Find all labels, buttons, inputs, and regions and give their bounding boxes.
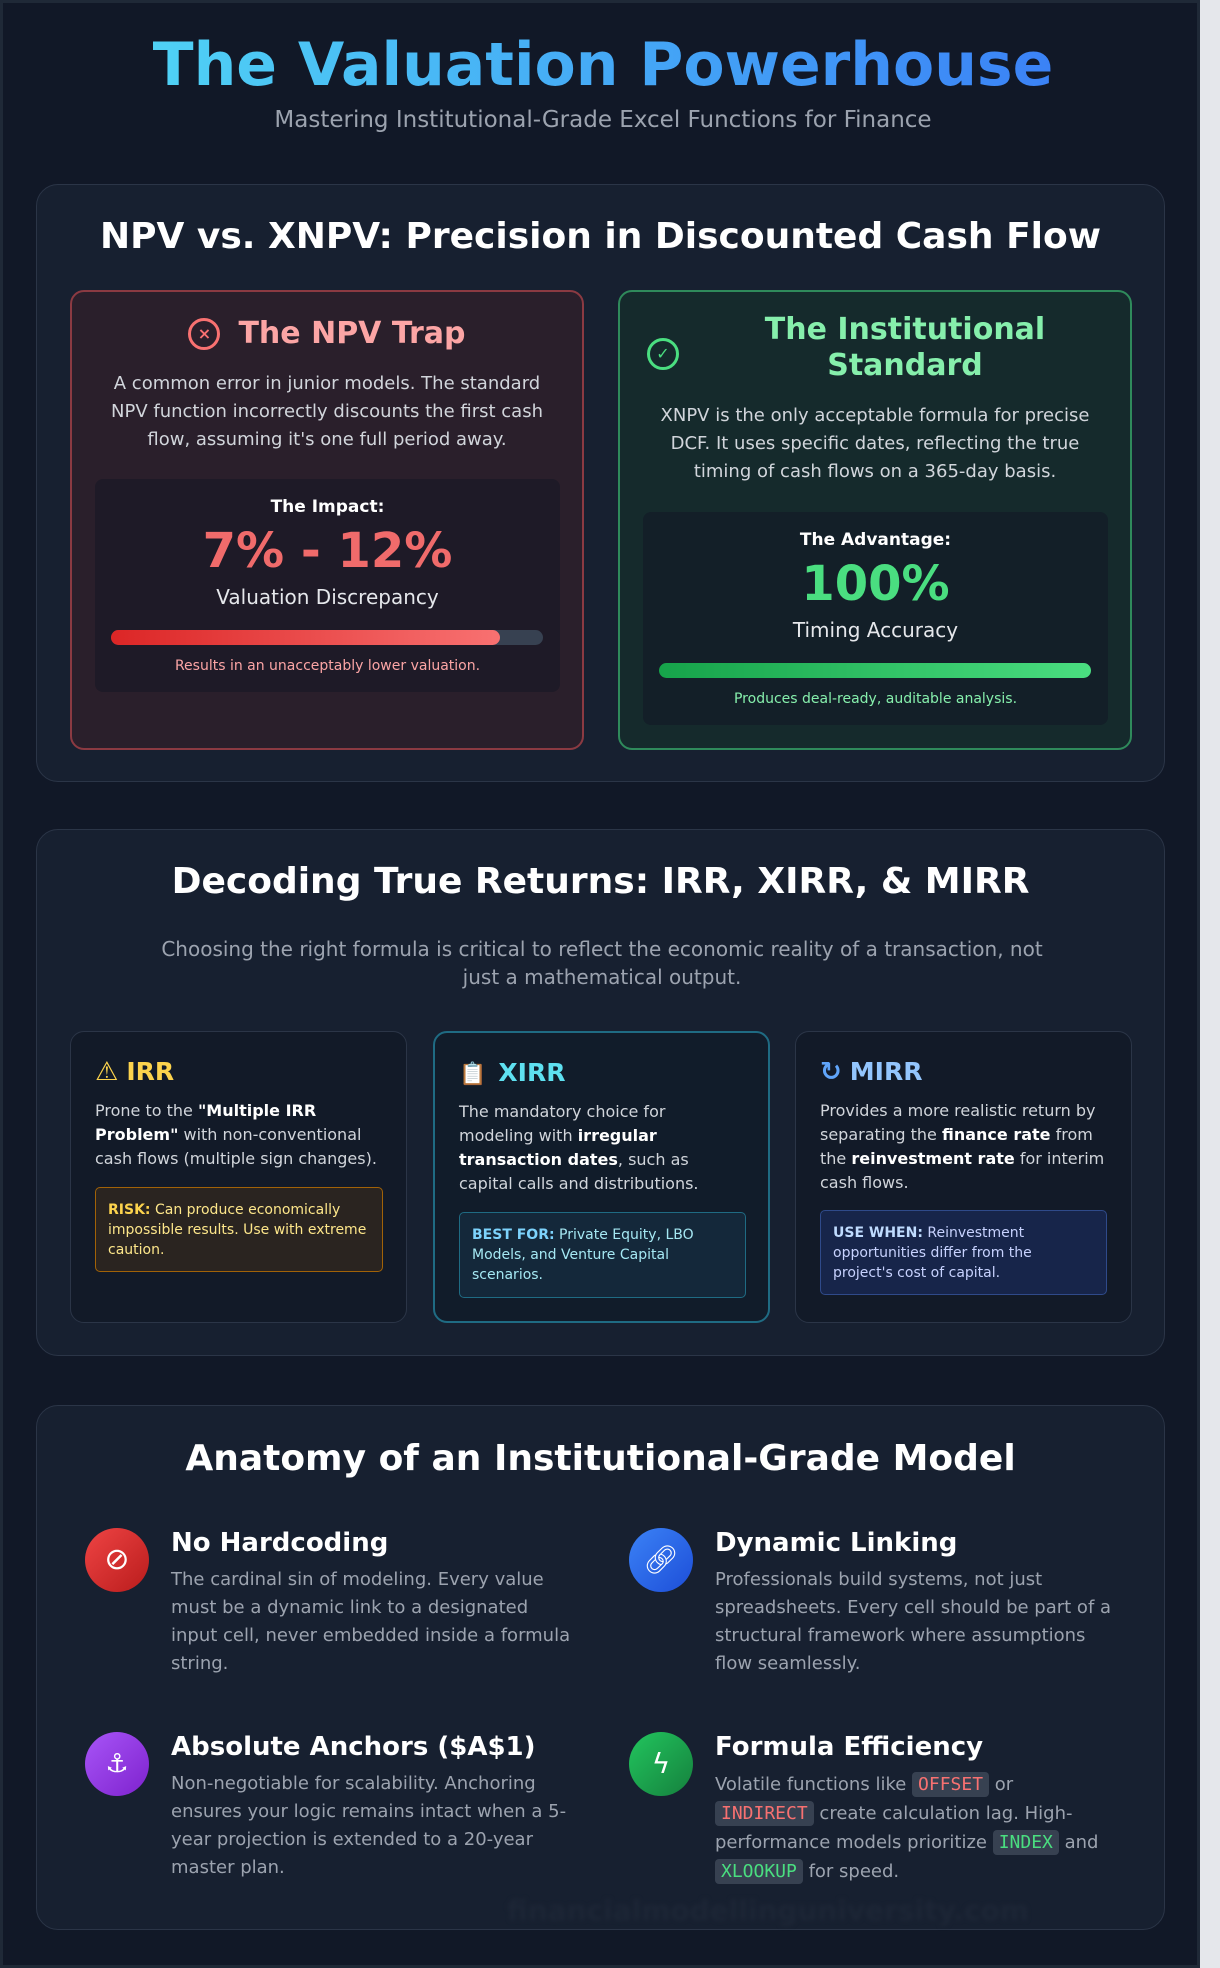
- impact box: [95, 479, 560, 692]
- panel: anatomy: [36, 1405, 1165, 1930]
- card: XIRR: The mandatory choice for modeling with irregular transaction dates, such as capital calls and distributions.: [459, 1102, 699, 1193]
- heading: returns: Decoding True Returns: IRR, XIRR, & MIRR: [172, 861, 1029, 902]
- item: absolute anchors: Absolute Anchors ($A$1): [171, 1732, 536, 1762]
- item: dynamic linking: Dynamic Linking: [715, 1528, 957, 1558]
- heading: institutional standard: The Institutional Standard: [765, 312, 1045, 383]
- card: NPV trap: [70, 290, 584, 750]
- stat: 7%-12%: 7% - 12%: [203, 523, 452, 579]
- callout: risk: RISK: Can produce economically impossible results. Use with extreme caution.: [108, 1202, 366, 1258]
- callout: best for: BEST FOR: Private Equity, LBO Models, and Venture Capital scenarios.: [472, 1227, 694, 1283]
- heading: NPV trap with icon: ×: [198, 324, 211, 343]
- item: formula efficiency: [629, 1732, 1098, 1884]
- card: Institutional standard: [618, 290, 1132, 750]
- advantage box: Timing Accuracy: [793, 618, 958, 642]
- icon: ban: [85, 1528, 149, 1592]
- heading: IRR: ⚠ IRR: [95, 1057, 174, 1087]
- callout: use when: USE WHEN: Reinvestment opportunities differ from the project's cost of capital.: [833, 1225, 1032, 1281]
- stat: 100%: 100%: [801, 556, 950, 612]
- item: formula efficiency: Formula Efficiency: [715, 1732, 983, 1762]
- advantage box: [643, 512, 1108, 725]
- item: dynamic linking: [629, 1528, 1111, 1674]
- advantage box: The Advantage:: [800, 530, 951, 550]
- card: IRR: [70, 1031, 407, 1323]
- text: XNPV description: XNPV is the only acceptable formula for precise DCF. It uses specific dates, reflecting the true timing of cash flows on a 365-day basis.: [661, 405, 1089, 482]
- callout: risk: [95, 1187, 383, 1272]
- item: formula efficiency: Volatile functions like OFFSET or INDIRECT create calculation lag. High-performance models prioritize INDEX and XLOOKUP for speed.: [715, 1774, 1098, 1882]
- advantage box: Produces deal-ready, auditable analysis.: [734, 691, 1017, 707]
- heading: anatomy: Anatomy of an Institutional-Grade Model: [185, 1438, 1016, 1479]
- bar: advantage: [659, 663, 1091, 678]
- icon: check: [647, 338, 679, 370]
- icon: anchor: [85, 1732, 149, 1796]
- item: absolute anchors: [85, 1732, 566, 1878]
- bar: impact: [111, 630, 543, 645]
- subtitle: Mastering Institutional-Grade Excel Functions for Finance: [274, 107, 932, 133]
- icon: bolt: ϟ: [652, 1747, 670, 1780]
- item: no hardcoding: The cardinal sin of modeling. Every value must be a dynamic link to a designated input cell, never embedded inside a formula string.: [171, 1569, 570, 1674]
- icon: link: [629, 1528, 693, 1592]
- heading: NPV trap with icon: The NPV Trap: [238, 316, 466, 351]
- icon: link: 🔗︎: [643, 1543, 679, 1576]
- text: NPV trap description: A common error in junior models. The standard NPV function incorrectly discounts the first cash flow, assuming it's one full period away.: [111, 373, 543, 450]
- icon: check: ✓: [656, 344, 670, 363]
- heading: MIRR: ↻ MIRR: [820, 1057, 922, 1087]
- callout: use when: [820, 1210, 1107, 1295]
- title: The Valuation Powerhouse: [153, 30, 1053, 100]
- impact box: Valuation Discrepancy: [216, 585, 439, 609]
- icon: bolt: [629, 1732, 693, 1796]
- panel: returns: [36, 829, 1165, 1356]
- callout: best for: [459, 1212, 746, 1298]
- item: no hardcoding: No Hardcoding: [171, 1528, 388, 1558]
- item: dynamic linking: Professionals build systems, not just spreadsheets. Every cell should be part of a structural framework where assumptions flow seamlessly.: [715, 1569, 1111, 1674]
- icon: anchor: ⚓︎: [105, 1749, 129, 1779]
- item: no hardcoding: [85, 1528, 570, 1674]
- intro text: Choosing the right formula is critical to reflect the economic reality of a transaction, not just a mathematical output.: [161, 937, 1043, 989]
- card: IRR: Prone to the "Multiple IRR Problem" with non-conventional cash flows (multiple sign changes).: [95, 1101, 377, 1168]
- item: absolute anchors: Non-negotiable for scalability. Anchoring ensures your logic remains intact when a 5-year projection is extended to a 20-year master plan.: [171, 1773, 566, 1878]
- card: MIRR: [795, 1031, 1132, 1323]
- card: MIRR: Provides a more realistic return by separating the finance rate from the reinvestment rate for interim cash flows.: [820, 1101, 1104, 1192]
- impact box: The Impact:: [271, 497, 384, 517]
- card: XIRR: [433, 1031, 770, 1323]
- panel: NPV vs XNPV: [36, 184, 1165, 782]
- icon: ban: ⊘: [104, 1542, 130, 1577]
- impact box: Results in an unacceptably lower valuation.: [175, 658, 480, 674]
- heading: XIRR: 📋 XIRR: [459, 1058, 565, 1087]
- heading: NPV vs XNPV: NPV vs. XNPV: Precision in Discounted Cash Flow: [100, 216, 1101, 257]
- watermark: financialmodellinguniversity.com: [507, 1894, 1029, 1927]
